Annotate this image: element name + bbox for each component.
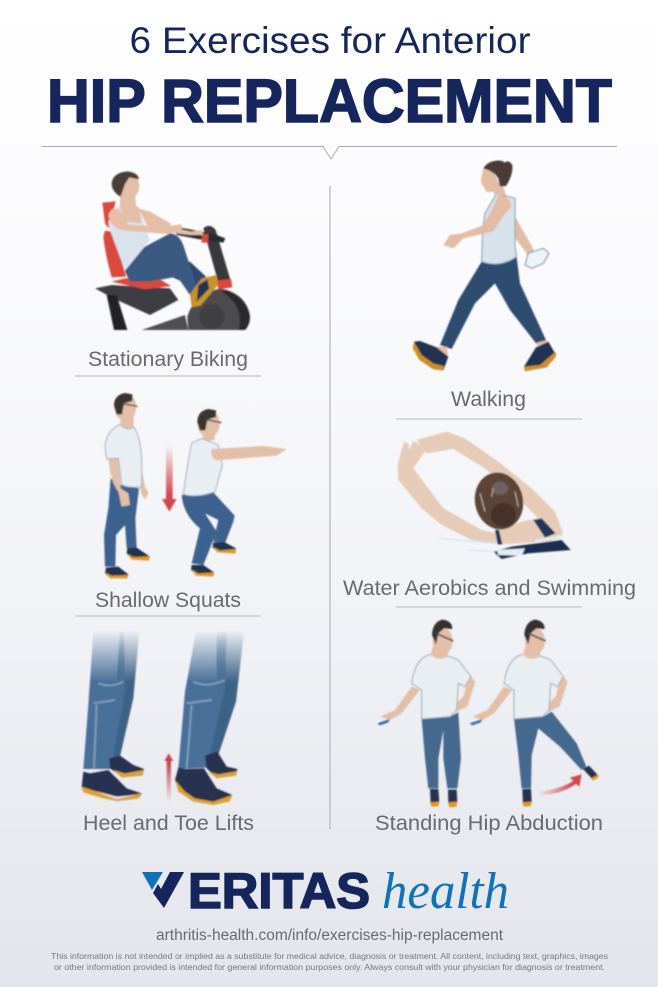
- title: line one: 6 Exercises for Anterior: [130, 20, 530, 61]
- label: heel and toe lifts: Heel and Toe Lifts: [83, 812, 254, 835]
- label: stationary biking: Stationary Biking: [88, 348, 248, 371]
- title: line two: HIP REPLACEMENT: [47, 67, 612, 135]
- illustration: water aerobics: [398, 432, 571, 559]
- label: shallow squats: Shallow Squats: [95, 589, 241, 612]
- disclaimer: [51, 951, 608, 972]
- column divider: [329, 186, 331, 829]
- header divider with notch: [42, 146, 617, 159]
- second figure: [470, 620, 598, 807]
- label: standing hip abduction: Standing Hip Abduction: [375, 812, 603, 835]
- logo mark: blue triangle: [142, 872, 163, 890]
- source URL: arthritis-health.com/info/exercises-hip-replacement: [156, 927, 504, 944]
- illustration: walking: [413, 161, 556, 371]
- illustration: heel and toe lifts: [82, 632, 244, 805]
- logo mark: navy V: [153, 872, 184, 908]
- rule: stationary biking: [75, 375, 261, 377]
- arrow: leg motion: [538, 774, 582, 795]
- logo: Veritas Health: [142, 863, 509, 920]
- logo wordmark: Veritas: ERITAS: [188, 863, 370, 919]
- illustration: standing hip abduction: [377, 620, 598, 807]
- rule: shallow squats: [75, 615, 261, 617]
- disclaimer: This information is not intended or implied as a substitute for medical advice, diagnosis or treatment. All content, including text, graphics, images: [51, 951, 608, 961]
- label: walking: Walking: [451, 388, 526, 411]
- rule: walking: [396, 418, 582, 420]
- disclaimer: or other information provided is intended for general information purposes only. Always consult with your physician for diagnosis or treatment.: [54, 962, 605, 972]
- label: water aerobics: Water Aerobics and Swimming: [343, 577, 636, 600]
- illustration: stationary biking: [95, 171, 250, 330]
- rule: water aerobics: [396, 606, 582, 608]
- illustration: shallow squats: [104, 393, 287, 578]
- first figure: [377, 620, 475, 807]
- logo wordmark: health: health: [382, 863, 509, 920]
